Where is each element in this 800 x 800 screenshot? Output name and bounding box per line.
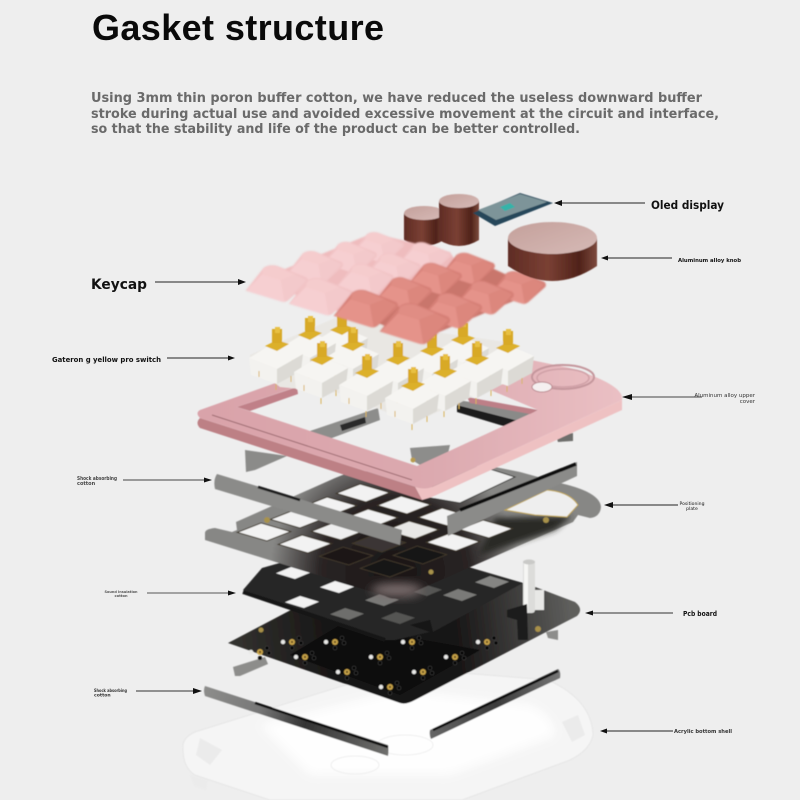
cover mounting brackets [245, 400, 573, 472]
small knob right [439, 194, 479, 246]
exploded keyboard illustration [183, 193, 622, 800]
foam body [243, 540, 523, 640]
lower shock absorbing foam strips [204, 669, 560, 756]
switches [249, 311, 534, 430]
label: Aluminum alloy upper cover [622, 393, 756, 405]
description text: stroke during actual use and avoided excessive movement at the circuit and interface, [91, 106, 719, 122]
oled display module [473, 193, 553, 226]
label: Sound insulation cotton: Sound insulation [104, 590, 138, 594]
positioning plate [205, 466, 601, 599]
description text [91, 90, 719, 137]
light pink keycaps [246, 232, 480, 315]
label: Pcb board [585, 610, 717, 618]
label: Positioning plate: plate [686, 506, 698, 512]
description text: Using 3mm thin poron buffer cotton, we have reduced the useless downward buffer [91, 90, 702, 106]
sound insulation foam [243, 540, 523, 640]
pcb board [228, 549, 580, 704]
label: Shock absorbing cotton (upper): Shock absorbing [77, 476, 117, 482]
label: Acrylic bottom shell: Acrylic bottom shell [674, 729, 732, 735]
label: Aluminum alloy upper cover: cover [740, 399, 756, 405]
small knob left [404, 206, 444, 246]
aluminum alloy upper cover [198, 335, 622, 500]
label: Shock absorbing cotton (lower): cotton [94, 692, 111, 698]
description text: so that the stability and life of the product can be better controlled. [91, 121, 580, 137]
encoder and connector [507, 560, 544, 640]
label: Positioning plate [604, 501, 705, 512]
label: Shock absorbing cotton (lower): Shock absorbing [94, 688, 127, 694]
pcb mounting tabs [233, 630, 558, 676]
label: Sound insulation cotton [104, 590, 236, 598]
label: Keycap [91, 277, 246, 293]
label: Acrylic bottom shell [600, 728, 732, 735]
label: Aluminum alloy knob: Aluminum alloy knob [678, 258, 741, 264]
upper shock absorbing foam bars [214, 462, 577, 545]
label: Gateron g yellow pro switch: Gateron g yellow pro switch [52, 356, 161, 364]
dark pink keycaps [334, 253, 546, 344]
label: Aluminum alloy knob [601, 256, 741, 264]
large aluminum knob [508, 222, 597, 281]
label: Shock absorbing cotton (lower) [94, 688, 202, 698]
label: Sound insulation cotton: cotton [114, 594, 128, 598]
foam front bar [243, 592, 385, 640]
foam windows [276, 567, 509, 624]
label: Keycap: Keycap [91, 277, 147, 293]
title: Gasket structure [92, 7, 384, 48]
label: Shock absorbing cotton (upper) [77, 476, 212, 487]
acrylic bottom shell [183, 668, 593, 800]
label: Oled display [554, 198, 724, 212]
label: Oled display: Oled display [651, 198, 724, 212]
label: Shock absorbing cotton (upper): cotton [77, 481, 96, 487]
label: Gateron g yellow pro switch [52, 356, 235, 364]
light keycap backing [258, 233, 480, 312]
label: Aluminum alloy upper cover: Aluminum alloy upper [694, 393, 756, 399]
dark keycap backing [345, 258, 540, 340]
label: Positioning plate: Positioning [680, 501, 705, 507]
keycaps [246, 232, 546, 344]
label: Pcb board: Pcb board [683, 610, 717, 618]
switch mass backing [250, 318, 533, 423]
